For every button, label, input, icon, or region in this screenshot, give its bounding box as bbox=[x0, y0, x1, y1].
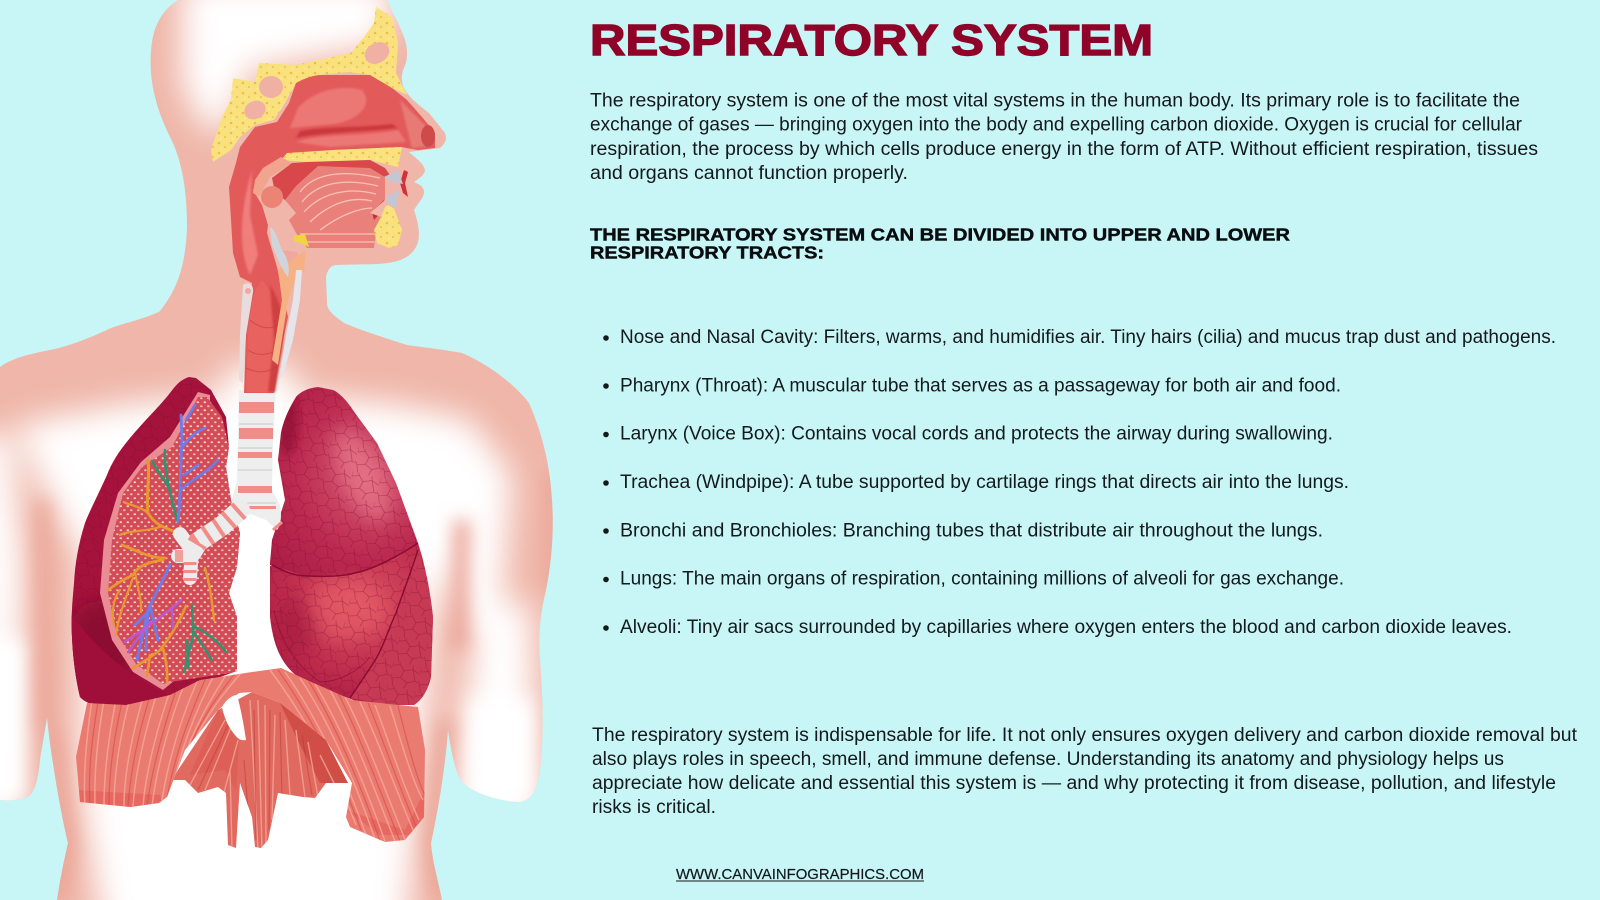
footer website link: WWW.CANVAINFOGRAPHICS.COM bbox=[676, 867, 924, 883]
bullet: trachea: Trachea (Windpipe): A tube supported by cartilage rings that directs air into the lungs. bbox=[620, 472, 1349, 493]
bullet: alveoli: Alveoli: Tiny air sacs surrounded by capillaries where oxygen enters the blood and carbon dioxide leaves. bbox=[620, 617, 1512, 638]
nasal cavity and pharynx bbox=[229, 75, 435, 393]
closing paragraph: The respiratory system is indispensable for life. It not only ensures oxygen delivery and carbon dioxide removal but bbox=[592, 725, 1578, 746]
sinus cavities bbox=[241, 38, 393, 123]
body silhouette with skin shading bbox=[0, 0, 560, 900]
jaw bone bbox=[374, 203, 402, 248]
intro paragraph bbox=[590, 90, 1538, 184]
intro paragraph: The respiratory system is one of the most vital systems in the human body. Its primary role is to facilitate the bbox=[590, 90, 1520, 112]
left lung bbox=[72, 377, 240, 705]
bullet: larynx: Larynx (Voice Box): Contains vocal cords and protects the airway during swallowing. bbox=[620, 424, 1333, 445]
bullet: nose: Nose and Nasal Cavity: Filters, warms, and humidifies air. Tiny hairs (cilia) and mucus trap dust and pathogens. bbox=[620, 327, 1556, 348]
hard palate bbox=[281, 147, 402, 167]
section heading: RESPIRATORY TRACTS: bbox=[590, 242, 824, 262]
diaphragm muscle bbox=[76, 668, 425, 848]
tonsil bbox=[261, 186, 283, 208]
closing paragraph: risks is critical. bbox=[592, 797, 716, 818]
title: RESPIRATORY SYSTEM bbox=[590, 16, 1153, 65]
nasal conchae bbox=[290, 88, 366, 128]
section heading: THE RESPIRATORY SYSTEM CAN BE DIVIDED INTO UPPER AND LOWER bbox=[590, 225, 1290, 245]
left bronchus bbox=[175, 510, 240, 586]
epiglottis and larynx bbox=[239, 228, 306, 383]
diaphragm main sheets bbox=[76, 668, 425, 842]
lung cut section with alveoli bbox=[108, 397, 240, 684]
bronchial tree: purple branches bbox=[125, 600, 181, 652]
sinus bone bbox=[211, 7, 407, 162]
bullet: bronchi: Bronchi and Bronchioles: Branching tubes that distribute air throughout the lungs. bbox=[620, 520, 1323, 541]
oral cavity bbox=[272, 160, 392, 200]
illustration: human torso with respiratory organs bbox=[0, 0, 560, 900]
soft palate bbox=[253, 157, 292, 197]
intro paragraph: respiration, the process by which cells produce energy in the form of ATP. Without efficient respiration, tissues bbox=[590, 139, 1538, 160]
lips and teeth bbox=[384, 170, 408, 207]
intro paragraph: and organs cannot function properly. bbox=[590, 163, 908, 184]
trachea and bronchi bbox=[175, 390, 282, 586]
diaphragm central opening bbox=[222, 695, 246, 740]
lung lobe fissures bbox=[272, 543, 418, 698]
bronchial tree: green branches bbox=[152, 450, 226, 672]
bullet: lungs: Lungs: The main organs of respiration, containing millions of alveoli for gas exchange. bbox=[620, 569, 1344, 590]
right lung bbox=[270, 387, 433, 705]
intro paragraph: exchange of gases — bringing oxygen into the body and expelling carbon dioxide. Oxygen is crucial for cellular bbox=[590, 115, 1523, 136]
hyoid bone bbox=[294, 234, 309, 247]
pharynx shading bbox=[242, 170, 258, 275]
bullet: pharynx: Pharynx (Throat): A muscular tube that serves as a passageway for both air and food. bbox=[620, 375, 1341, 396]
bronchial tree: blue branches bbox=[135, 405, 218, 660]
tongue bbox=[285, 166, 385, 248]
section heading bbox=[590, 225, 1290, 262]
bullet list bbox=[603, 327, 1556, 638]
closing paragraph bbox=[592, 725, 1578, 818]
closing paragraph: also plays roles in speech, smell, and immune defense. Understanding its anatomy and physiology helps us bbox=[592, 749, 1504, 770]
closing paragraph: appreciate how delicate and essential this system is — and why protecting it from disease, pollution, and lifestyle bbox=[592, 773, 1556, 794]
lung cut section rim bbox=[100, 392, 210, 690]
diaphragm lower crura fan bbox=[174, 692, 348, 848]
bronchial tree: orange branches bbox=[108, 460, 214, 682]
